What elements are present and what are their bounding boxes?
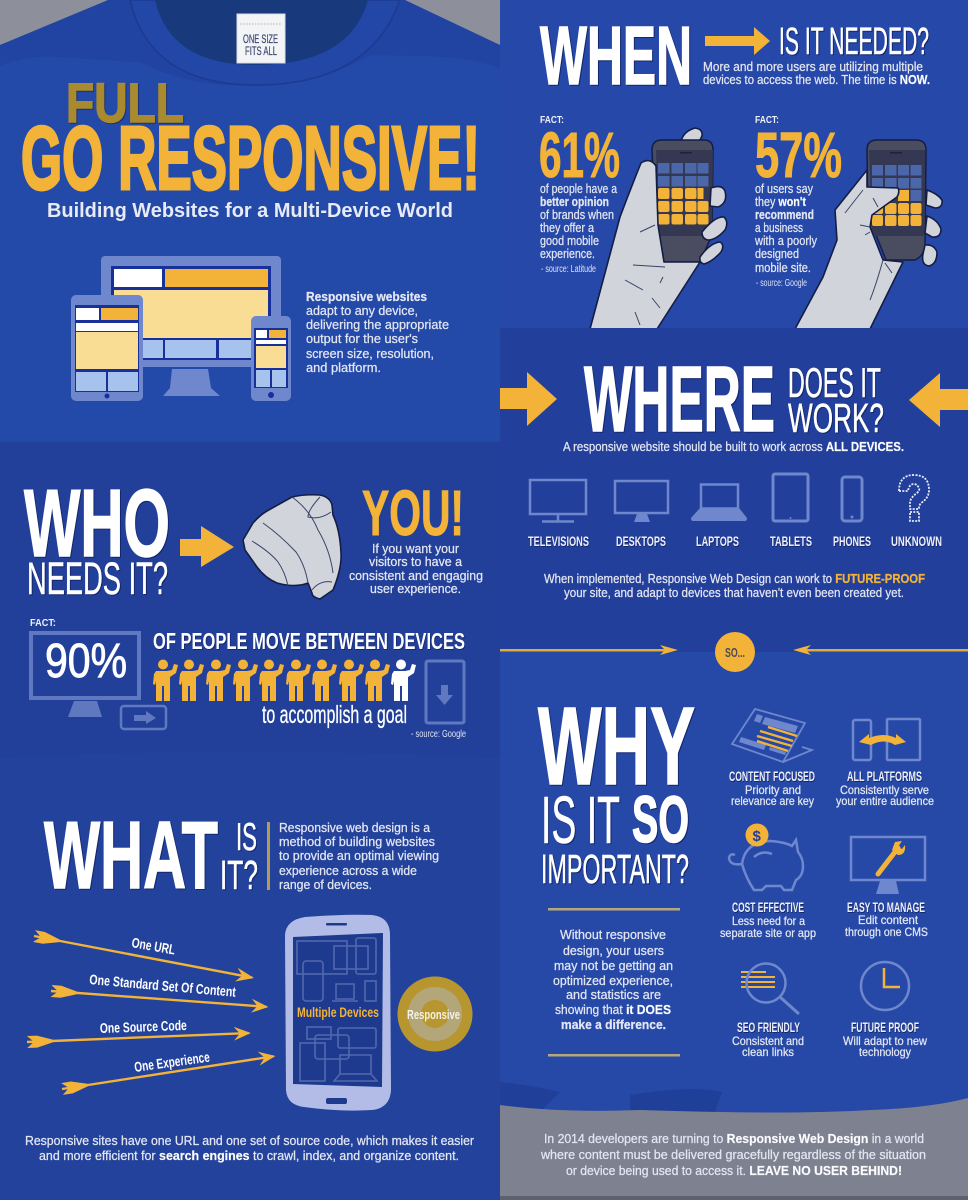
arrow — [180, 526, 234, 567]
icon: monitor with 90 percent: 90% — [45, 635, 127, 688]
arrow: one experience — [61, 1049, 277, 1096]
text: responsive websites: and platform. — [306, 360, 381, 375]
text: definition — [279, 820, 439, 892]
text: 57 percent description: a business — [755, 220, 803, 235]
text: responsive websites: output for the user's — [306, 331, 418, 346]
feature: all platforms: your entire audience — [836, 794, 934, 808]
feature: future proof — [843, 962, 927, 1059]
t-shirt collar — [0, 0, 500, 85]
text: 61 percent description: - source: Latitude — [541, 264, 596, 275]
arrow: one url: One URL — [130, 934, 177, 958]
panel: closing note — [500, 1082, 968, 1200]
icon: phone — [842, 477, 862, 521]
text: 57 percent description: of users say — [755, 181, 813, 196]
text: 57 percent description: mobile site. — [755, 260, 811, 275]
text: future proof — [544, 571, 925, 600]
source: - source: Google — [411, 729, 466, 740]
heading: you: YOU! — [362, 477, 464, 549]
text: closing — [540, 1131, 926, 1178]
text: 61 percent description: good mobile — [540, 233, 599, 248]
panel: go responsive hero — [0, 0, 500, 442]
heading: work: WORK? — [788, 395, 884, 441]
icon: responsive devices — [71, 256, 291, 401]
text: consistent experience: consistent and engaging — [349, 568, 483, 583]
text: responsive websites: delivering the appropriate — [306, 317, 449, 332]
t-shirt shoulder corners — [0, 0, 500, 45]
text: definition: Responsive web design is a — [279, 820, 431, 835]
subtitle: Building Websites for a Multi-Device World — [47, 200, 453, 222]
icon: unknown question mark — [899, 475, 929, 521]
text: future proof: your site, and adapt to devices that haven't even been created yet. — [564, 585, 904, 600]
stat: 57 percent: 57% — [755, 119, 842, 191]
feature: content focused: Priority and — [745, 783, 801, 797]
arrow: from left — [500, 372, 557, 426]
text: without responsive design — [553, 927, 673, 1032]
feature: easy to manage: Edit content — [858, 913, 919, 927]
heading: does it: DOES IT — [788, 359, 881, 406]
heading: what: WHAT — [44, 802, 218, 909]
feature: cost effective: Less need for a — [732, 914, 805, 928]
text: consistent experience: If you want your — [372, 541, 460, 556]
feature: future proof: Will adapt to new — [843, 1034, 927, 1048]
title: full: FULL — [66, 71, 184, 134]
text: definition: method of building websites — [279, 834, 435, 849]
text: closing: In 2014 developers are turning to Responsive Web Design in a world — [544, 1131, 924, 1146]
feature: seo friendly: clean links — [742, 1045, 794, 1059]
text: multiple devices: More and more users are utilizing multiple — [703, 59, 923, 74]
feature: cost effective: COST EFFECTIVE — [732, 899, 804, 915]
panel: why is it so important — [500, 652, 968, 1122]
icon: big phone with multiple devices — [285, 915, 391, 1111]
arrow — [705, 27, 770, 55]
feature: seo friendly: Consistent and — [732, 1034, 804, 1048]
label: phones: PHONES — [833, 533, 871, 549]
divider: so: SO... — [725, 645, 745, 660]
text: definition: experience across a wide — [279, 863, 417, 878]
feature: seo friendly — [732, 964, 804, 1059]
icon: responsive target — [398, 976, 472, 1052]
icon: laptop — [691, 484, 747, 521]
text: responsive websites: Responsive websites — [306, 289, 427, 304]
feature: easy to manage: through one CMS — [845, 925, 928, 939]
text: 57 percent description: they won't — [755, 194, 807, 209]
text: 57 percent description: with a poorly — [754, 233, 817, 248]
feature: all platforms: Consistently serve — [840, 783, 929, 797]
text: 57 percent description: designed — [755, 246, 799, 261]
text: without responsive design: design, your users — [563, 943, 664, 958]
feature: content focused — [729, 709, 815, 808]
text: responsive websites — [306, 289, 449, 375]
text: consistent experience: user experience. — [370, 581, 461, 596]
label: tablets: TABLETS — [770, 533, 812, 549]
text: 61 percent description: of brands when — [540, 207, 614, 222]
heading: important: IMPORTANT? — [541, 846, 689, 892]
pictogram: nine of ten people — [153, 660, 416, 701]
panel: who needs it — [0, 442, 500, 762]
icon: landscape phone — [121, 706, 166, 729]
text: 61 percent description: they offer a — [540, 220, 595, 235]
heading: why: WHY — [538, 685, 695, 808]
text: closing: where content must be delivered gracefully regardless of the situation — [540, 1147, 926, 1162]
text: 57 percent description: - source: Google — [756, 278, 807, 289]
text: without responsive design: showing that it DOES — [555, 1002, 671, 1017]
text: 57 percent description: recommend — [755, 207, 814, 222]
arrow: one source code: One Source Code — [100, 1017, 187, 1036]
text: definition: to provide an optimal viewing — [279, 848, 439, 863]
arrow: one source code — [27, 1017, 251, 1049]
heading: so: SO — [632, 782, 689, 856]
text: closing: or device being used to access it. LEAVE NO USER BEHIND! — [566, 1163, 902, 1178]
arrow: one standard set of content — [50, 971, 269, 1014]
text: multiple devices — [703, 59, 930, 87]
label: unknown: UNKNOWN — [891, 533, 942, 549]
icon: television — [530, 480, 586, 522]
panel: where does it work — [500, 328, 968, 652]
text: without responsive design: make a difference. — [561, 1017, 666, 1032]
size tag — [237, 14, 285, 63]
text: all devices: A responsive website should be built to work across ALL DEVICES. — [563, 439, 904, 454]
text: 61 percent description: experience. — [540, 246, 595, 261]
icon: hand holding phone, 57 percent — [795, 140, 942, 329]
panel: what is it — [0, 752, 500, 1200]
icon: desktop — [615, 481, 668, 522]
text: future proof: When implemented, Responsive Web Design can work to FUTURE-PROOF — [544, 571, 925, 586]
text: without responsive design: Without responsive — [560, 927, 666, 942]
stat: 61 percent: 61% — [539, 119, 620, 191]
size tag: FITS ALL — [245, 44, 277, 58]
icon: clock — [861, 962, 909, 1010]
label: desktops: DESKTOPS — [616, 533, 666, 549]
size tag: ONE SIZE — [243, 32, 278, 46]
label: laptops: LAPTOPS — [696, 533, 739, 549]
text: 61 percent description: of people have a — [540, 181, 618, 196]
title: go responsive: GO RESPONSIVE! — [21, 109, 480, 209]
heading: who: WHO — [24, 470, 170, 577]
text: responsive websites: adapt to any device, — [306, 303, 418, 318]
heading: it: IT? — [220, 852, 258, 898]
label: fact: FACT: — [30, 618, 56, 629]
heading: is it: IS IT — [541, 783, 620, 858]
text: consistent experience — [349, 541, 483, 596]
text: responsive websites: screen size, resolution, — [306, 346, 434, 361]
heading: is: IS — [236, 816, 257, 859]
heading: of people move between devices: OF PEOPLE MOVE BETWEEN DEVICES — [153, 628, 465, 654]
arrow: one experience: One Experience — [133, 1049, 211, 1075]
feature: future proof: technology — [859, 1045, 911, 1059]
label: televisions: TELEVISIONS — [528, 533, 589, 549]
feature: cost effective: separate site or app — [720, 926, 816, 940]
icon: monitor with 90 percent — [31, 633, 139, 717]
label: fact: FACT: — [755, 115, 779, 126]
text: consistent experience: visitors to have a — [369, 554, 463, 569]
icon: hand holding phone, 61 percent — [590, 128, 727, 329]
text: without responsive design: optimized experience, — [553, 973, 673, 988]
arrow: one standard set of content: One Standard Set Of Content — [89, 971, 237, 1000]
heading: needs it: NEEDS IT? — [27, 553, 168, 604]
text: definition: range of devices. — [279, 877, 372, 892]
text: search engines: and more efficient for search engines to crawl, index, and organize content. — [39, 1148, 459, 1163]
icon: tablet — [773, 474, 808, 521]
feature: content focused: CONTENT FOCUSED — [729, 768, 815, 784]
text: without responsive design: may not be getting an — [554, 958, 673, 973]
text: 61 percent description — [540, 181, 618, 275]
icon: content laptop — [732, 709, 812, 762]
feature: all platforms: ALL PLATFORMS — [847, 768, 922, 784]
icon: responsive target: Responsive — [407, 1007, 460, 1022]
feature: all platforms — [836, 719, 934, 808]
feature: seo friendly: SEO FRIENDLY — [737, 1019, 800, 1035]
text: without responsive design: and statistics are — [566, 987, 661, 1002]
feature: content focused: relevance are key — [731, 794, 814, 808]
feature: easy to manage — [845, 837, 928, 939]
arrow: from right — [909, 373, 968, 427]
icon: magnifying glass — [741, 964, 799, 1014]
divider: so — [500, 632, 968, 672]
text: search engines: Responsive sites have one URL and one set of source code, which makes it easier — [25, 1133, 475, 1148]
feature: cost effective — [720, 824, 816, 940]
icon: phone and tablet — [853, 719, 920, 760]
heading: where: WHERE — [584, 347, 775, 451]
feature: future proof: FUTURE PROOF — [851, 1019, 919, 1035]
panel: when is it needed — [500, 0, 968, 330]
icon: big phone with multiple devices: Multiple Devices — [297, 1004, 379, 1020]
icon: tablet with down arrow — [426, 661, 464, 723]
icon: piggy bank: $ — [752, 828, 762, 845]
text: multiple devices: devices to access the web. The time is NOW. — [703, 72, 930, 87]
icon: pointing fist — [243, 495, 341, 599]
text: 57 percent description — [754, 181, 817, 289]
text: 61 percent description: better opinion — [540, 194, 609, 209]
label: fact: FACT: — [540, 115, 564, 126]
heading: when: WHEN — [540, 9, 692, 102]
text: to accomplish a goal: to accomplish a goal — [262, 701, 407, 729]
icon: monitor with wrench — [851, 837, 925, 894]
text: search engines — [25, 1133, 475, 1163]
arrow: one url — [33, 929, 255, 985]
